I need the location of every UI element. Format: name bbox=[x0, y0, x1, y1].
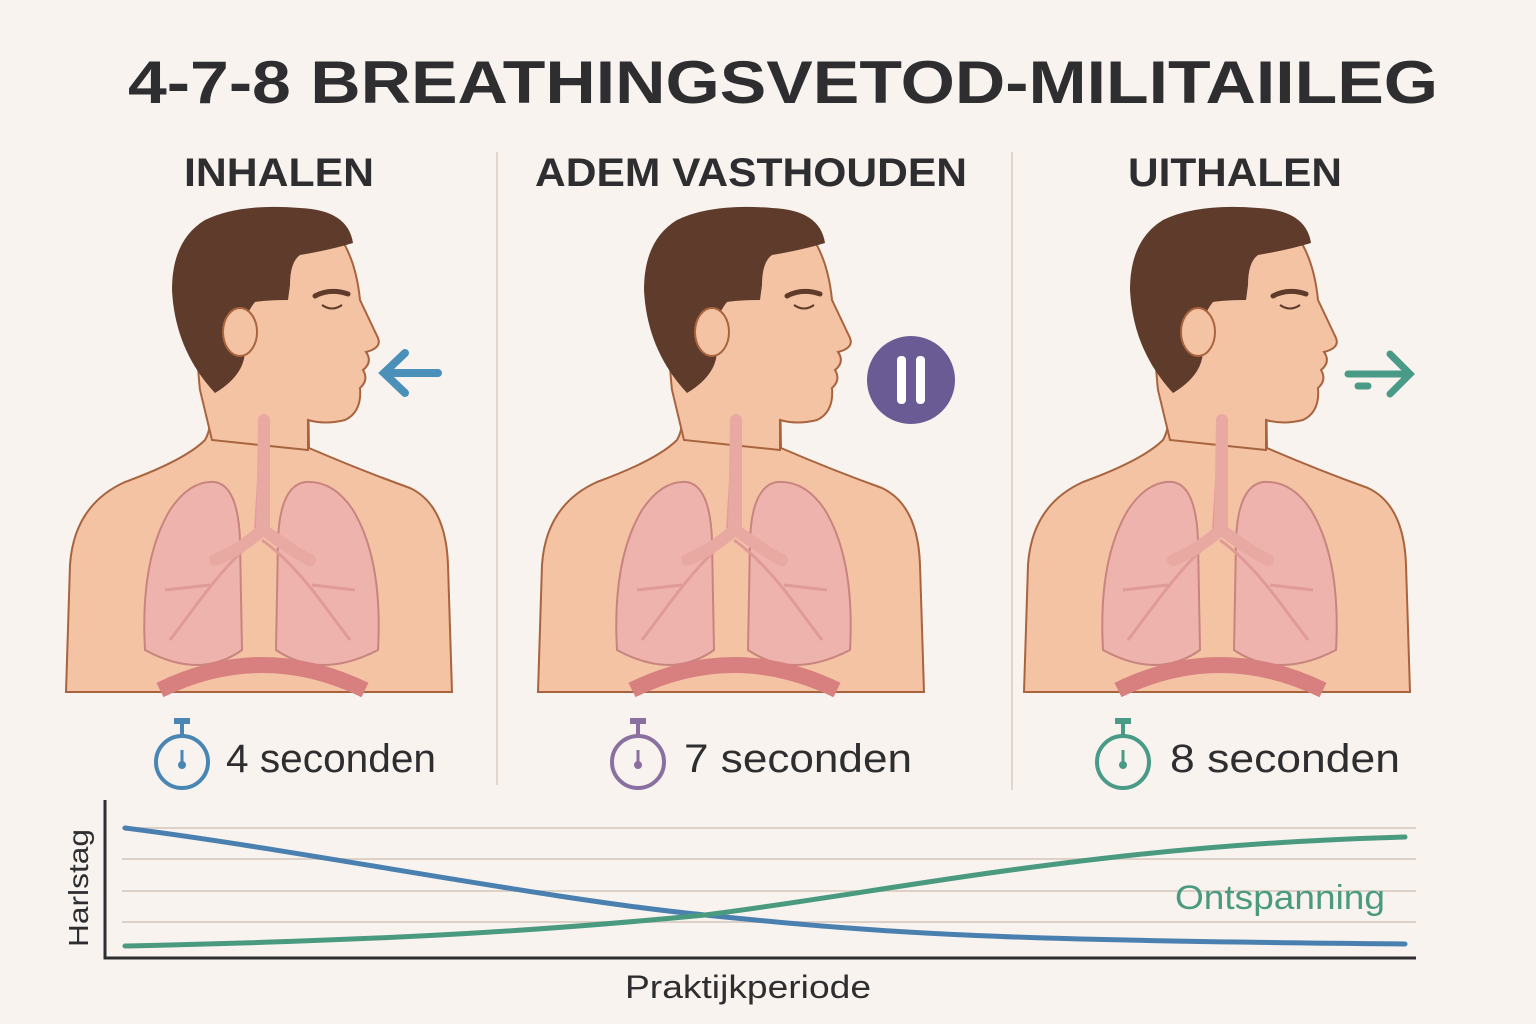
heading: inhalen: INHALEN bbox=[184, 151, 374, 195]
panel: inhalen bbox=[66, 151, 452, 788]
line: stress (blue) bbox=[125, 828, 1405, 944]
heading: adem vasthouden: ADEM VASTHOUDEN bbox=[535, 151, 967, 195]
label: ontspanning: Ontspanning bbox=[1175, 879, 1385, 917]
icon: pause bbox=[867, 336, 955, 424]
timer: 7 seconden bbox=[612, 718, 912, 788]
figure: person holding breath bbox=[538, 207, 924, 692]
panel: adem vasthouden bbox=[535, 151, 967, 788]
figure: person inhaling bbox=[66, 207, 452, 692]
arrow: exhale bbox=[1348, 354, 1410, 394]
heading: uithalen: UITHALEN bbox=[1128, 151, 1342, 195]
timer: 7 seconden: 7 seconden bbox=[684, 737, 912, 781]
line chart bbox=[63, 800, 1416, 1005]
title: 4-7-8 BREATHINGSVETOD-MILITAIILEG bbox=[128, 49, 1438, 116]
x-axis label: Praktijkperiode bbox=[625, 969, 871, 1005]
timer: 4 seconden bbox=[156, 718, 436, 788]
timer: 8 seconden bbox=[1097, 718, 1400, 788]
panel: uithalen bbox=[1024, 151, 1410, 788]
timer: 8 seconden: 8 seconden bbox=[1170, 737, 1400, 781]
line: relaxation (green) bbox=[125, 837, 1405, 946]
timer: 4 seconden: 4 seconden bbox=[226, 737, 436, 781]
figure: person exhaling bbox=[1024, 207, 1410, 692]
y-axis label: Harlstag bbox=[63, 829, 94, 947]
arrow: inhale bbox=[384, 353, 438, 393]
